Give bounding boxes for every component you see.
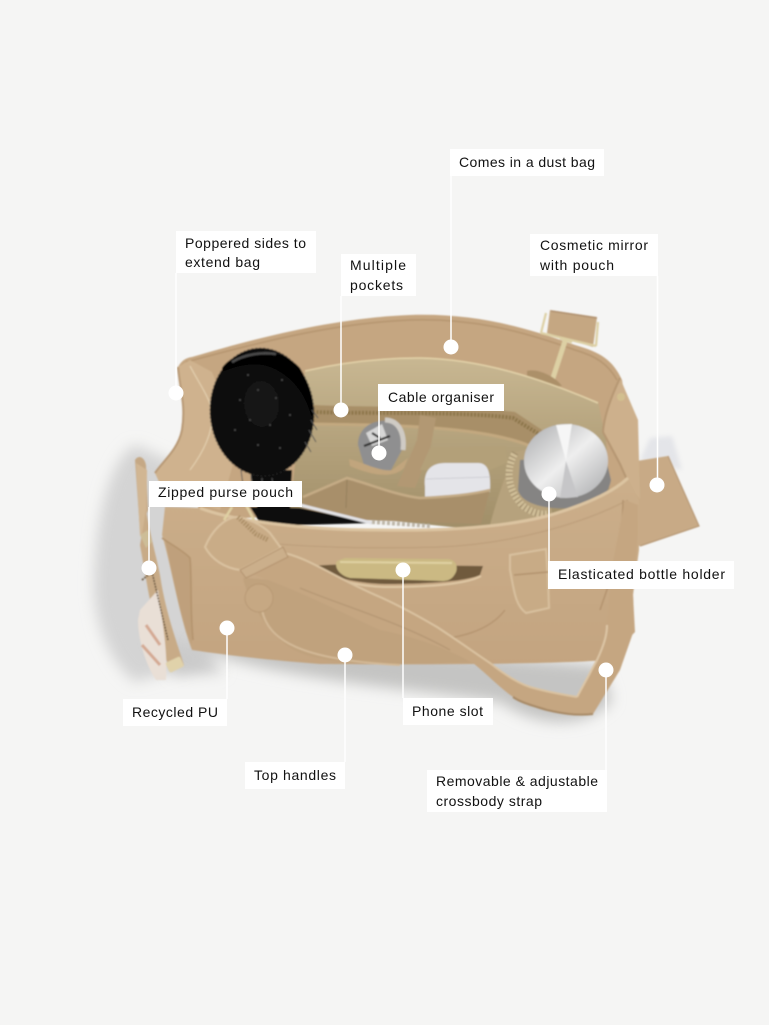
bag front face xyxy=(162,478,639,664)
lining top piping xyxy=(305,358,598,403)
callout: top handles xyxy=(245,648,352,789)
top handle xyxy=(243,578,470,665)
phone slot xyxy=(310,564,483,587)
callout: crossbody strap xyxy=(427,662,614,812)
zip pocket xyxy=(305,405,548,446)
icon: hair brush xyxy=(206,345,318,512)
icon: steel bottle xyxy=(518,424,611,508)
side buckle tab xyxy=(420,549,549,640)
callout: cable organiser xyxy=(372,384,504,460)
bag back panel xyxy=(178,315,640,520)
icon: side popper xyxy=(617,393,625,401)
icon: airpods case xyxy=(425,463,490,497)
callout: top handles: Top handles xyxy=(254,767,336,783)
callout: recycled PU: Recycled PU xyxy=(132,704,218,720)
back rim stitching xyxy=(186,320,617,380)
callout: zipped purse pouch: Zipped purse pouch xyxy=(158,484,293,500)
callout: cosmetic mirror: Cosmetic mirror xyxy=(540,237,648,253)
icon: phone xyxy=(336,558,457,581)
bag photo xyxy=(135,310,699,715)
callout: zipped purse pouch xyxy=(142,481,302,576)
callout: cosmetic mirror: with pouch xyxy=(539,257,614,273)
callout: poppered sides: extend bag xyxy=(185,254,260,270)
shadows xyxy=(94,436,682,722)
callout: poppered sides: Poppered sides to xyxy=(185,235,306,251)
callout: cable organiser: Cable organiser xyxy=(388,389,494,405)
callout: multiple pockets: pockets xyxy=(350,277,403,293)
callout: comes in a dust bag xyxy=(444,149,604,354)
callout: crossbody strap: Removable & adjustable xyxy=(436,773,598,789)
callout: phone slot xyxy=(396,562,493,725)
icon: tablet xyxy=(250,505,430,526)
icon: cosmetic mirror pouch xyxy=(625,456,699,546)
side gusset seam xyxy=(165,540,192,645)
callout: cosmetic mirror xyxy=(530,234,664,492)
elastic holder xyxy=(490,448,552,526)
callout: recycled PU xyxy=(123,620,234,726)
strap tab xyxy=(205,505,288,578)
left interior wall xyxy=(155,360,240,510)
front rim piping xyxy=(200,478,628,530)
right seam xyxy=(600,500,623,610)
icon: pull tab xyxy=(397,415,436,488)
callout: comes in a dust bag: Comes in a dust bag xyxy=(459,154,595,170)
icon: zipped purse pouch xyxy=(135,457,184,680)
callout: multiple pockets xyxy=(334,254,416,418)
crossbody strap xyxy=(240,500,638,715)
right interior wall xyxy=(603,378,640,500)
icon: strap end and clasp xyxy=(527,310,598,388)
inner slip pocket xyxy=(420,446,508,470)
callout: poppered sides xyxy=(168,231,316,400)
callout: elasticated bottle holder xyxy=(542,486,734,589)
icon: cable organiser xyxy=(349,420,408,475)
callout: crossbody strap: crossbody strap xyxy=(436,793,542,809)
callout: phone slot: Phone slot xyxy=(412,703,483,719)
callout: multiple pockets: Multiple xyxy=(350,257,406,273)
front organiser pocket xyxy=(303,478,490,524)
callout: elasticated bottle holder: Elasticated bottle holder xyxy=(558,566,725,582)
interior lining xyxy=(290,358,610,530)
